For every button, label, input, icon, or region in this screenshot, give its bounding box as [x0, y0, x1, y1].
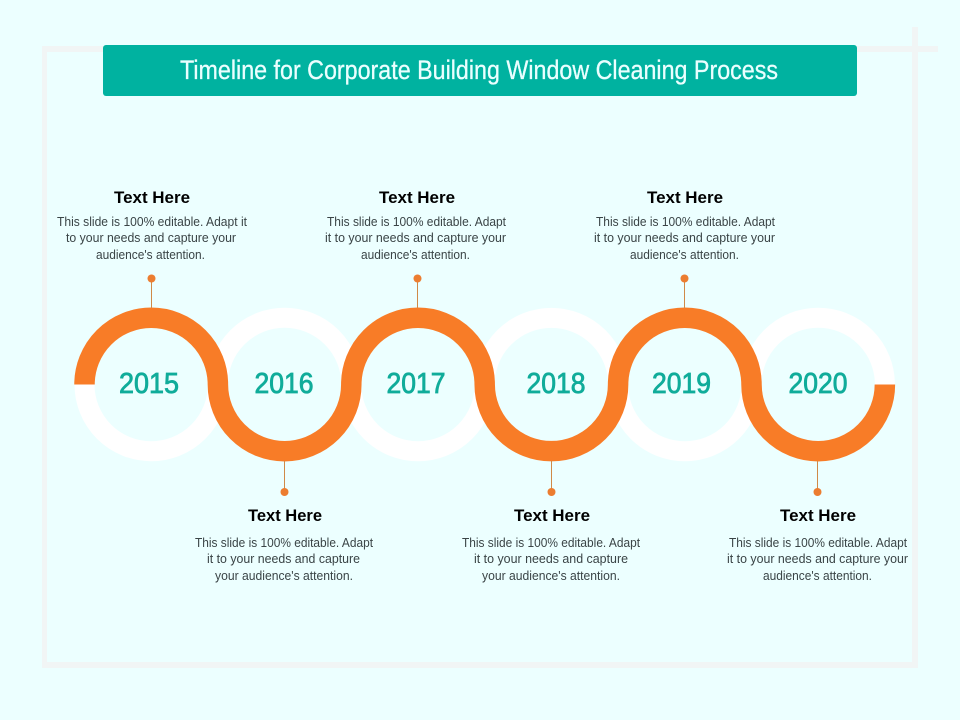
text block 2019: it to your needs and capture your — [594, 231, 775, 245]
text block 2020: it to your needs and capture your — [727, 552, 908, 566]
text block 2020: This slide is 100% editable. Adapt — [729, 536, 908, 550]
text block 2017 — [325, 188, 507, 262]
white background ring segments — [84, 318, 885, 451]
text block 2017: This slide is 100% editable. Adapt — [327, 215, 507, 229]
text block 2019: Text Here — [647, 188, 723, 207]
year 2017: 2017 — [386, 368, 446, 400]
title banner: Timeline for Corporate Building Window Cleaning Process — [180, 55, 778, 85]
year 2020: 2020 — [788, 368, 848, 400]
text block 2016: it to your needs and capture — [207, 552, 360, 566]
text block 2019: This slide is 100% editable. Adapt — [596, 215, 776, 229]
text block 2017: Text Here — [379, 188, 455, 207]
text block 2018: Text Here — [514, 506, 590, 525]
text block 2020 — [727, 506, 908, 583]
text block 2019 — [594, 188, 776, 262]
connector 2019 — [680, 274, 688, 308]
text block 2019: audience's attention. — [630, 248, 739, 262]
text block 2018: This slide is 100% editable. Adapt — [462, 536, 641, 550]
connector 2016 — [280, 461, 288, 496]
text block 2016: This slide is 100% editable. Adapt — [195, 536, 374, 550]
text block 2018 — [462, 506, 641, 583]
connector 2017 — [414, 274, 422, 308]
connector 2020 — [814, 461, 822, 496]
text block 2018: your audience's attention. — [482, 569, 620, 583]
text block 2016 — [195, 506, 374, 583]
text block 2015: This slide is 100% editable. Adapt it — [57, 215, 247, 229]
text block 2015: Text Here — [114, 188, 190, 207]
title banner — [103, 45, 857, 96]
connector 2018 — [548, 461, 556, 496]
text block 2020: Text Here — [780, 506, 856, 525]
year 2015: 2015 — [119, 368, 179, 400]
text block 2017: audience's attention. — [361, 248, 470, 262]
text block 2016: your audience's attention. — [215, 569, 353, 583]
year 2018: 2018 — [526, 368, 586, 400]
orange wave timeline — [84, 318, 885, 451]
text block 2020: audience's attention. — [763, 569, 872, 583]
text block 2015: audience's attention. — [96, 248, 205, 262]
year 2016: 2016 — [254, 368, 314, 400]
connector 2015 — [148, 274, 156, 308]
text block 2018: it to your needs and capture — [474, 552, 628, 566]
text block 2015: to your needs and capture your — [66, 231, 236, 245]
text block 2016: Text Here — [248, 506, 322, 525]
text block 2017: it to your needs and capture your — [325, 231, 506, 245]
text block 2015 — [57, 188, 247, 262]
year 2019: 2019 — [652, 368, 711, 400]
